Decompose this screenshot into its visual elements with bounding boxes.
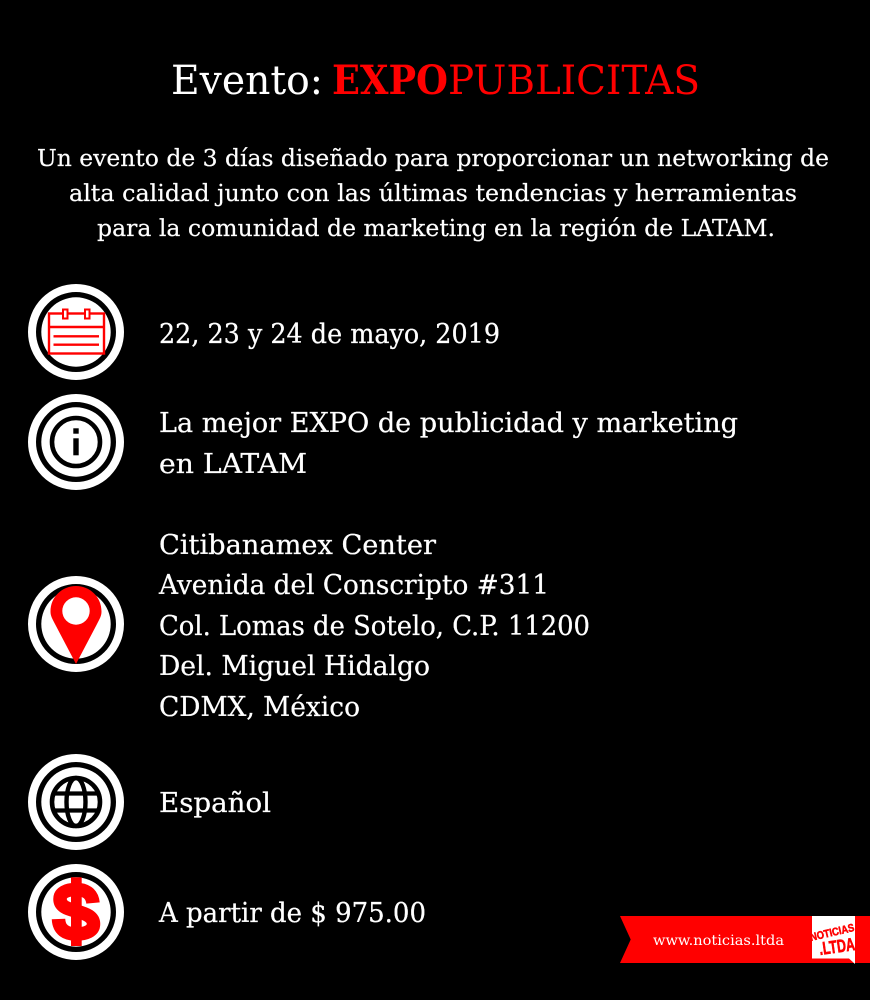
icon: globe: [32, 758, 120, 846]
logo: noticias ltda: [809, 916, 856, 964]
address text: Avenida del Conscripto #311: [158, 570, 549, 601]
description text: La mejor EXPO de publicidad y marketing: [159, 408, 738, 439]
title: EXPO: [332, 57, 448, 104]
icon: map pin: [32, 580, 120, 668]
address text: Col. Lomas de Sotelo, C.P. 11200: [159, 611, 590, 642]
description text: en LATAM: [159, 449, 307, 480]
address text: Citibanamex Center: [159, 530, 436, 561]
icon: calendar: [32, 288, 120, 376]
icon: dollar sign: [32, 868, 120, 956]
title: PUBLICITAS: [448, 58, 700, 104]
intro paragraph: alta calidad junto con las últimas tendencias y herramientas: [69, 179, 797, 207]
description text: [159, 408, 738, 480]
date text: 22, 23 y 24 de mayo, 2019: [159, 319, 500, 350]
address text: [158, 530, 590, 723]
logo: noticias ltda: NOTICIAS: [809, 922, 856, 944]
intro paragraph: Un evento de 3 días diseñado para proporcionar un networking de: [37, 144, 829, 172]
language text: Español: [159, 788, 271, 819]
banner: website ribbon: [620, 916, 870, 964]
address text: CDMX, México: [159, 692, 360, 723]
intro paragraph: [37, 144, 829, 242]
title: Evento:: [171, 58, 323, 104]
price text: A partir de $ 975.00: [158, 898, 426, 929]
title: [171, 57, 700, 104]
address text: Del. Miguel Hidalgo: [159, 651, 430, 682]
intro paragraph: para la comunidad de marketing en la región de LATAM.: [97, 214, 775, 242]
icon: info: [32, 398, 120, 486]
website url: www.noticias.ltda: [653, 933, 784, 949]
